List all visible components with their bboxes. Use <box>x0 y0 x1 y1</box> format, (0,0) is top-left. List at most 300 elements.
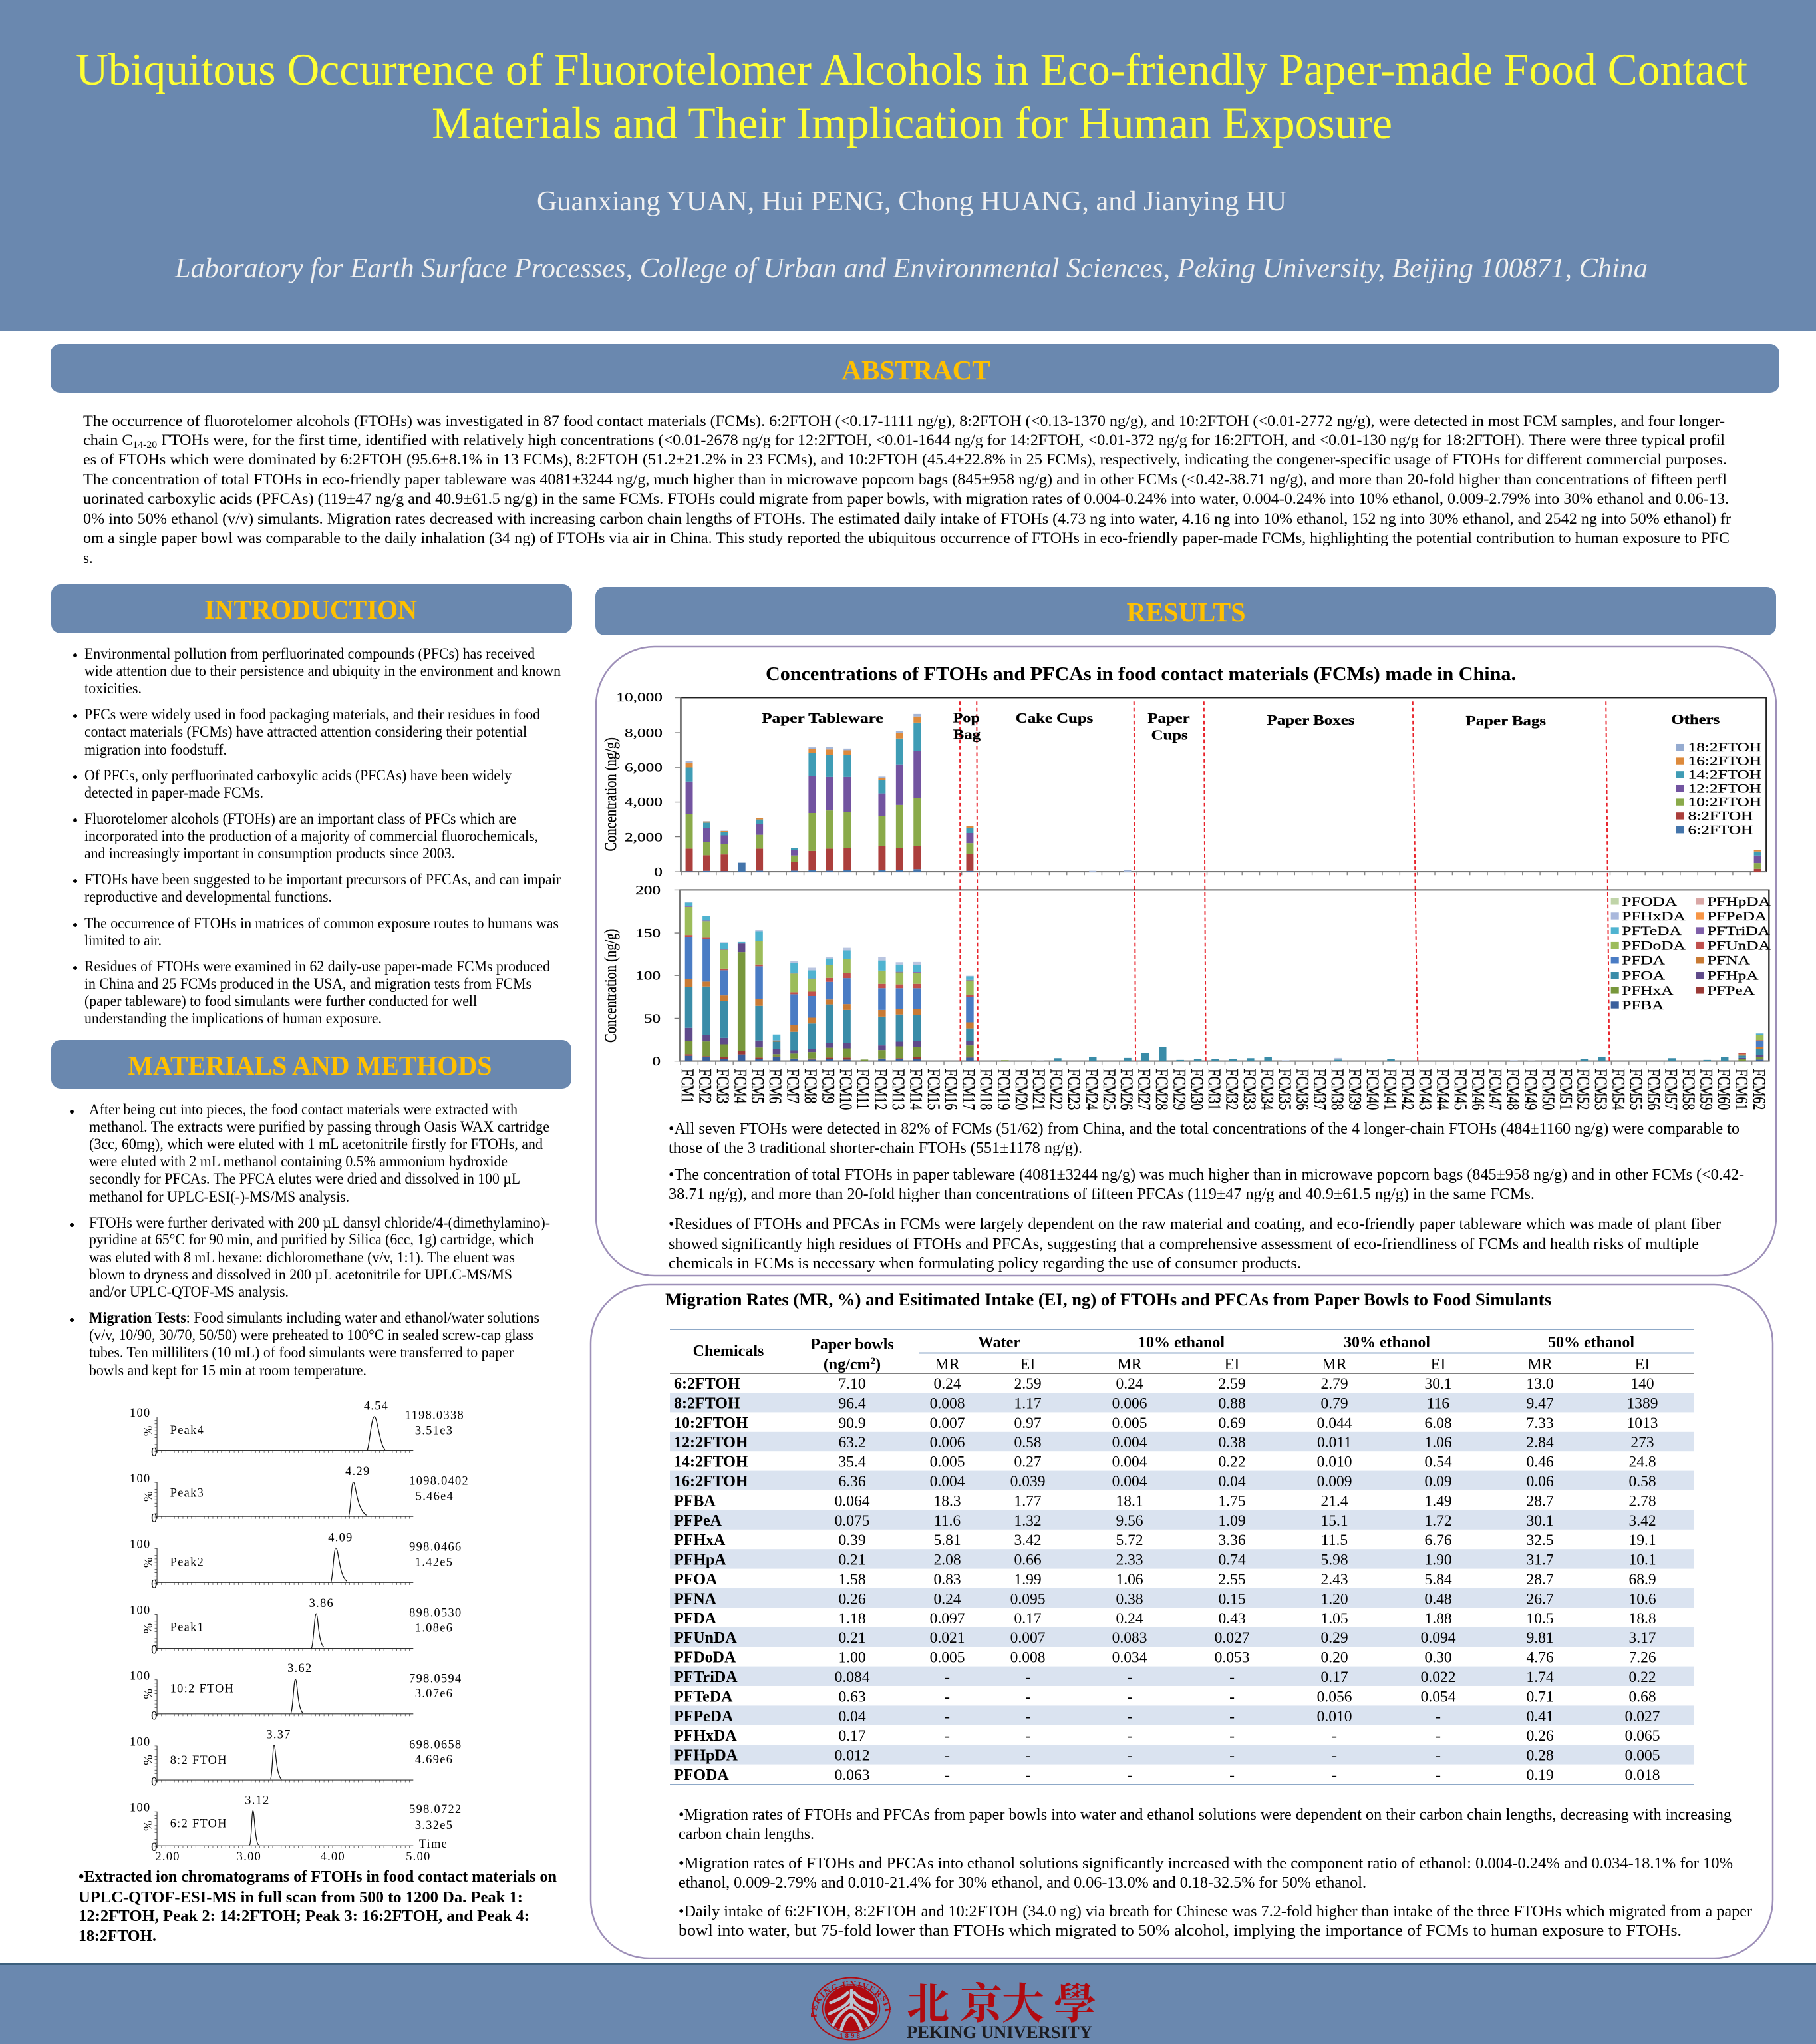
table rows: 9.81 <box>1526 1629 1554 1647</box>
chromatogram labels: 698.0658 <box>409 1737 462 1751</box>
materials and methods text: Migration Tests: Food simulants including water and ethanol/water solutions <box>89 1309 539 1327</box>
table rows: - <box>1025 1669 1030 1686</box>
table rows: 6.76 <box>1424 1532 1452 1549</box>
table rows: 0.28 <box>1526 1747 1554 1765</box>
materials and methods text: methanol for UPLC-ESI(-)-MS/MS analysis. <box>89 1188 349 1206</box>
table rows: 9.56 <box>1116 1512 1143 1530</box>
table header: EI <box>1635 1356 1650 1373</box>
chromatogram caption: 12:2FTOH, Peak 2: 14:2FTOH; Peak 3: 16:2FTOH, and Peak 4: <box>78 1908 530 1925</box>
table rows: 0.38 <box>1218 1434 1246 1451</box>
table header: (ng/cm <box>824 1356 871 1373</box>
abstract text: The occurrence of fluorotelomer alcohols (FTOHs) was investigated in 87 food contact materials (FCMs). 6:2FTOH (<0.17-1111 ng/g), 8:2FTOH (<0.13-1370 ng/g), and 10:2FTOH (<0.01-2772 ng/g), were detected in most FCM samples, and four longer- <box>83 413 1725 429</box>
abstract text: om a single paper bowl was comparable to the daily inhalation (34 ng) of FTOHs via air in China. This study reported the ubiquitous occurrence of FTOHs in eco-friendly paper-made FCMs, highlighting the potential contribution to human exposure to PFC <box>83 530 1730 546</box>
table rows: 1013 <box>1627 1415 1658 1432</box>
table rows: 0.30 <box>1424 1649 1452 1667</box>
legend: FTOHs: 16:2FTOH <box>1688 754 1761 768</box>
table rows: 1.18 <box>838 1610 866 1627</box>
table rows: 0.69 <box>1218 1415 1246 1432</box>
table rows: 30.1 <box>1424 1375 1452 1393</box>
migration findings text: bowl into water, but 75-fold lower than FTOHs which migrated to 50% alcohol, implying the importance of FCMs to human exposure to FTOHs. <box>679 1922 1682 1940</box>
table rows: 0.064 <box>835 1492 870 1510</box>
table rows: 0.004 <box>1112 1454 1147 1471</box>
table rows: 0.79 <box>1320 1395 1348 1412</box>
table rows: 0.021 <box>930 1629 965 1647</box>
sample labels: FCM48 <box>1503 1069 1523 1110</box>
table rows: 3.36 <box>1218 1532 1246 1549</box>
chromatogram caption: •Extracted ion chromatograms of FTOHs in food contact materials on <box>78 1868 557 1886</box>
table rows: 0.04 <box>1218 1473 1246 1490</box>
table rows: 2.33 <box>1116 1552 1143 1569</box>
table rows: PFHxDA <box>674 1727 737 1745</box>
chromatogram labels: 3.62 <box>287 1661 312 1675</box>
sample labels: FCM4 <box>730 1069 750 1104</box>
chromatogram labels: % <box>142 1425 155 1436</box>
concentration findings text: •Residues of FTOHs and PFCAs in FCMs were largely dependent on the raw material and coating, and eco-friendly paper tableware which was made of plant fiber <box>669 1216 1721 1233</box>
legend: PFCAs: PFHpDA <box>1707 894 1771 908</box>
sample labels: FCM26 <box>1116 1069 1136 1110</box>
table rows: 9.47 <box>1526 1395 1554 1412</box>
introduction text: toxicities. <box>84 680 142 697</box>
table rows: 1.58 <box>838 1571 866 1588</box>
chromatogram labels: 100 <box>130 1603 150 1618</box>
table rows: PFPeA <box>674 1512 722 1530</box>
table rows: 0.005 <box>930 1649 965 1667</box>
bottom chart y axis: Concentration (ng/g) <box>601 929 619 1043</box>
chromatogram labels: 1.42e5 <box>415 1555 453 1570</box>
table rows: 21.4 <box>1320 1492 1348 1510</box>
table rows: 1.00 <box>838 1649 866 1667</box>
concentration findings text: chemicals in FCMs is necessary when formulating policy regarding the use of consumer products. <box>669 1255 1301 1272</box>
table rows: PFBA <box>674 1492 716 1510</box>
bottom chart y axis: 100 <box>635 969 661 983</box>
sample labels: FCM61 <box>1732 1069 1751 1110</box>
top chart y axis: 4,000 <box>625 795 663 809</box>
table rows: 0.056 <box>1317 1688 1352 1705</box>
table rows: 19.1 <box>1628 1532 1656 1549</box>
chromatogram labels: 100 <box>130 1669 150 1683</box>
header band <box>0 0 1816 331</box>
table rows: - <box>1436 1708 1441 1725</box>
product group labels: Bag <box>953 727 981 743</box>
sample labels: FCM45 <box>1450 1069 1469 1110</box>
migration findings text <box>679 1806 1752 1940</box>
table rows: 0.24 <box>1116 1610 1143 1627</box>
concentration findings text <box>669 1120 1744 1272</box>
table rows: 1.77 <box>1014 1492 1042 1510</box>
table rows: 0.083 <box>1112 1629 1147 1647</box>
sample labels: FCM37 <box>1310 1069 1329 1110</box>
table rows: 0.094 <box>1421 1629 1456 1647</box>
table rows: 0.034 <box>1112 1649 1147 1667</box>
sample labels: FCM3 <box>712 1069 732 1103</box>
table rows: 0.004 <box>930 1473 965 1490</box>
table rows: 0.053 <box>1215 1649 1249 1667</box>
table rows: - <box>1436 1747 1441 1765</box>
icon: Peking University seal <box>811 1977 891 2040</box>
table rows: 32.5 <box>1526 1532 1554 1549</box>
product group labels <box>762 711 1720 743</box>
table rows: - <box>1436 1727 1441 1745</box>
sample labels: FCM27 <box>1134 1069 1153 1110</box>
table header: MR <box>1527 1356 1553 1373</box>
sample labels: FCM32 <box>1222 1069 1241 1110</box>
legend: FTOHs <box>1676 740 1761 837</box>
table rows: - <box>945 1688 950 1705</box>
table rows: 0.19 <box>1526 1767 1554 1784</box>
table header: Chemicals <box>693 1343 764 1360</box>
abstract heading <box>51 344 1779 393</box>
table rows: 0.007 <box>1010 1629 1046 1647</box>
chromatogram labels: Peak2 <box>170 1555 204 1570</box>
chromatogram labels: 100 <box>130 1406 150 1420</box>
sample labels: FCM43 <box>1415 1069 1435 1110</box>
table header: EI <box>1020 1356 1035 1373</box>
chromatogram labels: 3.86 <box>309 1596 334 1610</box>
introduction text: detected in paper-made FCMs. <box>84 784 263 802</box>
table rows: 28.7 <box>1526 1492 1554 1510</box>
table rows: 0.027 <box>1215 1629 1250 1647</box>
table rows: 3.42 <box>1014 1532 1042 1549</box>
table rows: 2.55 <box>1218 1571 1246 1588</box>
table rows: 1.49 <box>1424 1492 1452 1510</box>
legend: FTOHs: 6:2FTOH <box>1688 823 1753 837</box>
table rows: 18.8 <box>1628 1610 1656 1627</box>
table rows: 6:2FTOH <box>674 1375 740 1393</box>
table rows: 0.06 <box>1526 1473 1554 1490</box>
introduction text: reproductive and developmental functions. <box>84 888 332 906</box>
sample labels: FCM35 <box>1275 1069 1294 1110</box>
table rows: 14:2FTOH <box>674 1454 748 1471</box>
chromatogram labels: 3.32e5 <box>415 1818 453 1832</box>
table rows: 4.76 <box>1526 1649 1554 1667</box>
sample labels: FCM36 <box>1292 1069 1312 1110</box>
table rows: - <box>1025 1767 1030 1784</box>
chromatogram labels: 8:2 FTOH <box>170 1753 227 1767</box>
table rows: - <box>1127 1669 1132 1686</box>
table rows: 5.81 <box>933 1532 961 1549</box>
chromatogram labels: % <box>142 1754 155 1765</box>
introduction text: Fluorotelomer alcohols (FTOHs) are an important class of PFCs which are <box>84 810 516 828</box>
table rows: 0.21 <box>838 1629 866 1647</box>
icon: Peking University seal: PEKING UNIVERSITY <box>811 1981 891 2017</box>
table rows: 1.99 <box>1014 1571 1042 1588</box>
abstract heading: ABSTRACT <box>841 355 990 385</box>
table rows: - <box>945 1767 950 1784</box>
legend: PFCAs: PFODA <box>1622 894 1677 908</box>
table rows: 1.75 <box>1218 1492 1246 1510</box>
table rows: 68.9 <box>1628 1571 1656 1588</box>
table rows: PFNA <box>674 1590 717 1608</box>
chromatogram labels: 4.00 <box>321 1850 345 1864</box>
concentration findings text: those of the 3 traditional shorter-chain FTOHs (551±1178 ng/g). <box>669 1140 1082 1157</box>
table rows: 0.15 <box>1218 1590 1246 1608</box>
migration findings text: carbon chain lengths. <box>679 1826 814 1843</box>
table rows: 0.58 <box>1628 1473 1656 1490</box>
table rows: 2.59 <box>1014 1375 1042 1393</box>
bottom chart y axis: 150 <box>635 926 661 940</box>
chart title: Concentrations of FTOHs and PFCAs in food contact materials (FCMs) made in China. <box>766 664 1516 685</box>
table rows: - <box>1127 1688 1132 1705</box>
chromatogram labels: 3.07e6 <box>415 1687 453 1701</box>
chromatogram labels: 1098.0402 <box>409 1474 469 1488</box>
materials and methods text: blown to dryness and dissolved in 200 µL acetonitrile for UPLC-MS/MS <box>89 1266 512 1283</box>
table rows: 12:2FTOH <box>674 1434 748 1451</box>
sample labels: FCM20 <box>1011 1069 1030 1110</box>
table rows: 26.7 <box>1526 1590 1554 1608</box>
sample labels: FCM40 <box>1362 1069 1382 1110</box>
bottom chart y axis: 0 <box>652 1054 661 1068</box>
bottom chart y axis <box>601 883 661 1068</box>
sample labels: FCM41 <box>1380 1069 1400 1110</box>
table rows: 0.012 <box>835 1747 869 1765</box>
chromatogram caption: 18:2FTOH. <box>78 1928 156 1945</box>
concentration findings text: •All seven FTOHs were detected in 82% of FCMs (51/62) from China, and the total concentrations of the 4 longer-chain FTOHs (484±1160 ng/g) were comparable to <box>669 1120 1740 1138</box>
table rows: 0.011 <box>1317 1434 1352 1451</box>
table rows: 1.06 <box>1116 1571 1143 1588</box>
chromatogram caption <box>78 1868 557 1945</box>
table rows: PFDoDA <box>674 1649 736 1667</box>
table rows: - <box>1025 1688 1030 1705</box>
sample labels: FCM44 <box>1433 1069 1452 1110</box>
table rows: - <box>1229 1708 1235 1725</box>
table rows: 2.84 <box>1526 1434 1554 1451</box>
table header: 50% ethanol <box>1548 1334 1634 1351</box>
sample labels: FCM57 <box>1661 1069 1680 1110</box>
top chart y axis: 2,000 <box>625 830 663 844</box>
table rows: 7.33 <box>1526 1415 1554 1432</box>
materials and methods text: secondly for PFCAs. The PFCA elutes were dried and dissolved in 100 µL <box>89 1170 520 1188</box>
table rows: 0.71 <box>1526 1688 1554 1705</box>
introduction text: understanding the implications of human exposure. <box>84 1010 382 1027</box>
table rows: - <box>1332 1727 1337 1745</box>
chromatograms <box>130 1399 469 1864</box>
table rows: 0.004 <box>1112 1434 1147 1451</box>
sample labels: FCM22 <box>1046 1069 1066 1110</box>
legend: PFCAs: PFPeDA <box>1707 909 1767 923</box>
legend: PFCAs: PFOA <box>1622 969 1665 983</box>
table rows: 0.17 <box>1014 1610 1042 1627</box>
sample labels: FCM15 <box>923 1069 943 1110</box>
table rows: 0.006 <box>930 1434 965 1451</box>
introduction heading <box>51 584 572 633</box>
table rows: 2.43 <box>1320 1571 1348 1588</box>
table rows: 0.88 <box>1218 1395 1246 1412</box>
legend: FTOHs: 12:2FTOH <box>1688 781 1761 796</box>
materials and methods heading <box>51 1040 571 1089</box>
chromatogram labels <box>130 1399 469 1864</box>
chromatogram traces <box>249 1417 385 1845</box>
title <box>76 44 1747 148</box>
table rows: 0.41 <box>1526 1708 1554 1725</box>
table rows: 273 <box>1630 1434 1654 1451</box>
legend: PFCAs: PFBA <box>1622 998 1664 1012</box>
table rows: PFTeDA <box>674 1688 733 1705</box>
introduction text: and increasingly important in consumption products since 2003. <box>84 845 455 862</box>
chromatogram labels: 3.37 <box>266 1727 291 1742</box>
table rows: 0.24 <box>933 1590 961 1608</box>
sample labels: FCM24 <box>1082 1069 1101 1110</box>
introduction text: (paper tableware) to food simulants were further conducted for well <box>84 993 477 1010</box>
table rows: 96.4 <box>838 1395 866 1412</box>
table rows: 140 <box>1630 1375 1654 1393</box>
table rows: 0.063 <box>835 1767 869 1784</box>
bottom chart y axis: 200 <box>635 883 661 897</box>
table rows: 0.054 <box>1421 1688 1456 1705</box>
table rows: 0.22 <box>1218 1454 1246 1471</box>
table rows: 0.29 <box>1320 1629 1348 1647</box>
table rows: 1.74 <box>1526 1669 1554 1686</box>
chromatogram labels: 0 <box>151 1577 158 1592</box>
product group labels: Pop <box>953 711 980 726</box>
chromatogram labels: 1.08e6 <box>415 1621 453 1635</box>
chromatogram labels: Time <box>419 1837 448 1851</box>
table rows: - <box>1436 1767 1441 1784</box>
product group labels: Cups <box>1151 728 1188 743</box>
legend: FTOHs: 14:2FTOH <box>1688 767 1761 782</box>
chromatogram labels: 3.51e3 <box>415 1423 453 1438</box>
sample labels: FCM14 <box>906 1069 925 1110</box>
table rows: 90.9 <box>838 1415 866 1432</box>
legend: PFCAs: PFDA <box>1622 953 1665 967</box>
chromatogram labels: 4.54 <box>364 1399 388 1413</box>
table rows: 11.6 <box>934 1512 961 1530</box>
top chart y axis <box>601 690 663 879</box>
affiliation: Laboratory for Earth Surface Processes, College of Urban and Environmental Sciences, Peking University, Beijing 100871, China <box>174 254 1648 284</box>
table rows: 3.42 <box>1628 1512 1656 1530</box>
table rows: 2.78 <box>1628 1492 1656 1510</box>
introduction text <box>73 645 561 1027</box>
sample labels: FCM49 <box>1521 1069 1540 1110</box>
sample labels: FCM47 <box>1485 1069 1505 1110</box>
table header: 30% ethanol <box>1344 1334 1430 1351</box>
materials and methods text: was eluted with 8 mL hexane: dichloromethane (v/v, 1:1). The eluent was <box>89 1249 515 1266</box>
chromatogram labels: % <box>142 1490 155 1502</box>
table rows: 31.7 <box>1526 1552 1554 1569</box>
table rows: PFDA <box>674 1610 717 1627</box>
sample labels: FCM11 <box>853 1069 873 1110</box>
sample labels: FCM19 <box>994 1069 1013 1110</box>
migration findings text: ethanol, 0.009-2.79% and 0.010-21.4% for 30% ethanol, and 0.06-13.0% and 0.18-32.5% for 50% ethanol. <box>679 1874 1366 1892</box>
materials and methods text: (3cc, 60mg), which were eluted with 1 mL acetonitrile firstly for FTOHs, and <box>89 1136 543 1153</box>
table rows: 0.008 <box>930 1395 965 1412</box>
abstract text: chain C <box>83 432 130 448</box>
legend: PFCAs: PFDoDA <box>1622 939 1686 953</box>
materials and methods text: pyridine at 65°C for 90 min, and purified by Silica (6cc, 1g) cartridge, which <box>89 1231 534 1248</box>
table rows: PFHpA <box>674 1552 726 1569</box>
legend: PFCAs: PFTeDA <box>1622 924 1682 937</box>
table rows: 0.17 <box>838 1727 866 1745</box>
chromatogram labels: 100 <box>130 1537 150 1552</box>
table rows: 10.1 <box>1628 1552 1656 1569</box>
sample labels: FCM31 <box>1204 1069 1224 1110</box>
table rows: 5.72 <box>1116 1532 1143 1549</box>
table rows: 0.63 <box>838 1688 866 1705</box>
table header <box>693 1334 1650 1373</box>
table header: MR <box>1322 1356 1347 1373</box>
materials and methods text: bowls and kept for 15 min at room temperature. <box>89 1362 367 1379</box>
title: Ubiquitous Occurrence of Fluorotelomer Alcohols in Eco-friendly Paper-made Food Contact <box>76 44 1747 94</box>
table rows: 0.065 <box>1625 1727 1660 1745</box>
authors: Guanxiang YUAN, Hui PENG, Chong HUANG, and Jianying HU <box>537 186 1286 217</box>
concentration findings text: •The concentration of total FTOHs in paper tableware (4081±3244 ng/g) was much higher than in microwave popcorn bags (845±958 ng/g) and in other FCMs (<0.42- <box>669 1166 1744 1184</box>
table rows: 0.26 <box>838 1590 866 1608</box>
sample labels: FCM10 <box>835 1069 855 1110</box>
product group labels: Paper Bags <box>1466 713 1546 729</box>
table rows: 0.010 <box>1317 1454 1352 1471</box>
chromatogram labels: % <box>142 1622 155 1633</box>
introduction text: Environmental pollution from perfluorinated compounds (PFCs) has received <box>84 645 535 663</box>
table rows: 2.79 <box>1320 1375 1348 1393</box>
introduction text: Of PFCs, only perfluorinated carboxylic acids (PFCAs) have been widely <box>84 767 512 784</box>
table rows: PFPeDA <box>674 1708 734 1725</box>
sample labels: FCM7 <box>783 1069 802 1104</box>
chromatogram labels: 100 <box>130 1472 150 1486</box>
table rows: - <box>1025 1708 1030 1725</box>
sample labels: FCM25 <box>1099 1069 1118 1110</box>
table header: Water <box>978 1334 1020 1351</box>
table rows: 0.005 <box>1625 1747 1660 1765</box>
materials and methods text: and/or UPLC-QTOF-MS analysis. <box>89 1283 289 1301</box>
introduction text: PFCs were widely used in food packaging materials, and their residues in food <box>84 706 540 723</box>
concentration findings text: showed significantly high residues of FTOHs and PFCAs, suggesting that a comprehensive assessment of eco-friendliness of FCMs and health risks of multiple <box>669 1236 1699 1253</box>
table rows: 0.22 <box>1628 1669 1656 1686</box>
table rows: 0.24 <box>933 1375 961 1393</box>
table rows: 0.005 <box>1112 1415 1147 1432</box>
table rows: 15.1 <box>1320 1512 1348 1530</box>
table rows: - <box>1229 1688 1235 1705</box>
chromatogram labels: 3.00 <box>237 1850 261 1864</box>
table rows: 1.05 <box>1320 1610 1348 1627</box>
table rows: 0.075 <box>835 1512 869 1530</box>
table rows: - <box>945 1669 950 1686</box>
sample labels: FCM18 <box>976 1069 996 1110</box>
table rows: 1.20 <box>1320 1590 1348 1608</box>
table rows: PFHpDA <box>674 1747 738 1765</box>
table rows: - <box>1229 1747 1235 1765</box>
sample labels: FCM39 <box>1345 1069 1364 1110</box>
table rows: 6.08 <box>1424 1415 1452 1432</box>
table rows: 0.66 <box>1014 1552 1042 1569</box>
sample labels: FCM6 <box>765 1069 785 1103</box>
table rows: - <box>1229 1767 1235 1784</box>
product group labels: Paper <box>1147 711 1190 726</box>
sample labels: FCM52 <box>1573 1069 1592 1110</box>
chromatogram labels: % <box>142 1820 155 1831</box>
table rows: 0.43 <box>1218 1610 1246 1627</box>
table rows: 10.6 <box>1628 1590 1656 1608</box>
chromatogram labels: Peak3 <box>170 1486 204 1500</box>
introduction text: contact materials (FCMs) have attracted attention considering their potential <box>84 723 527 741</box>
sample labels: FCM2 <box>695 1069 714 1103</box>
sample labels: FCM16 <box>941 1069 961 1110</box>
top chart y axis: 8,000 <box>625 726 663 740</box>
table rows: 1.90 <box>1424 1552 1452 1569</box>
sample labels: FCM54 <box>1608 1069 1628 1110</box>
table rows: 0.084 <box>835 1669 870 1686</box>
sample labels: FCM13 <box>888 1069 908 1110</box>
chromatogram labels: 4.09 <box>328 1530 353 1544</box>
table rows: - <box>945 1747 950 1765</box>
sample labels: FCM51 <box>1556 1069 1575 1110</box>
chromatogram labels: 5.00 <box>406 1850 431 1864</box>
table rows: 28.7 <box>1526 1571 1554 1588</box>
chromatogram labels: 998.0466 <box>409 1540 462 1554</box>
sample labels: FCM60 <box>1714 1069 1734 1110</box>
table rows: 0.38 <box>1116 1590 1143 1608</box>
sample labels: FCM46 <box>1468 1069 1487 1110</box>
table rows: 5.84 <box>1424 1571 1452 1588</box>
materials and methods text: (v/v, 10/90, 30/70, 50/50) were preheated to 100°C in sealed screw-cap glass <box>89 1327 533 1344</box>
